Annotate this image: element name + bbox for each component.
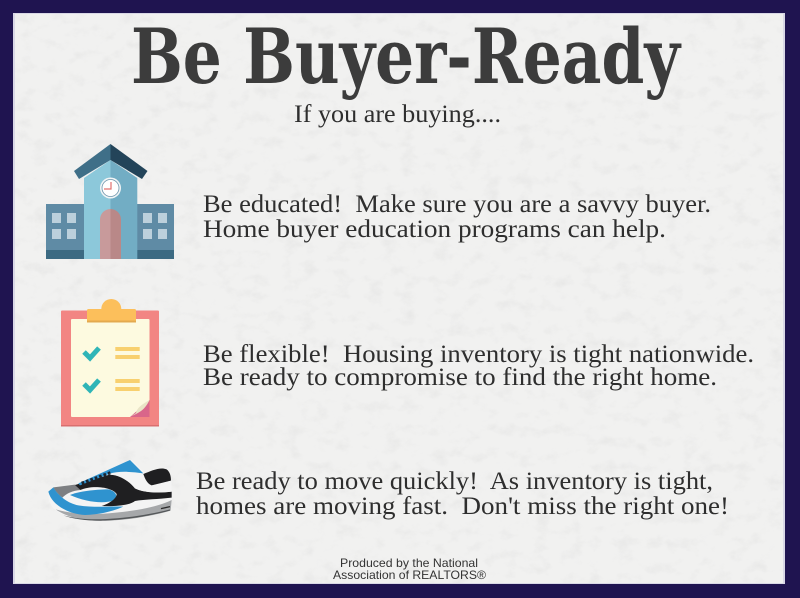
text: be educated: Be educated! Make sure you are a savvy buyer. [203, 191, 711, 218]
subtitle: If you are buying.... [294, 101, 501, 128]
title: Be Buyer-Ready [131, 12, 681, 101]
icon: school building [46, 144, 174, 259]
footer credit: Produced by the National [340, 556, 478, 570]
text: be flexible: Be ready to compromise to find the right home. [203, 364, 717, 391]
text: move quickly: homes are moving fast. Don't miss the right one! [196, 493, 729, 520]
text: move quickly [196, 468, 729, 520]
footer credit [333, 556, 486, 582]
footer credit: Association of REALTORS® [333, 568, 486, 582]
text: be educated: Home buyer education programs can help. [203, 216, 666, 243]
icon: clipboard checklist [61, 299, 159, 426]
text: move quickly: Be ready to move quickly! As inventory is tight, [196, 468, 713, 495]
text: be flexible: Be flexible! Housing inventory is tight nationwide. [203, 341, 754, 368]
text: be educated [203, 191, 711, 243]
text: be flexible [203, 341, 754, 391]
icon: running shoe [48, 459, 172, 521]
